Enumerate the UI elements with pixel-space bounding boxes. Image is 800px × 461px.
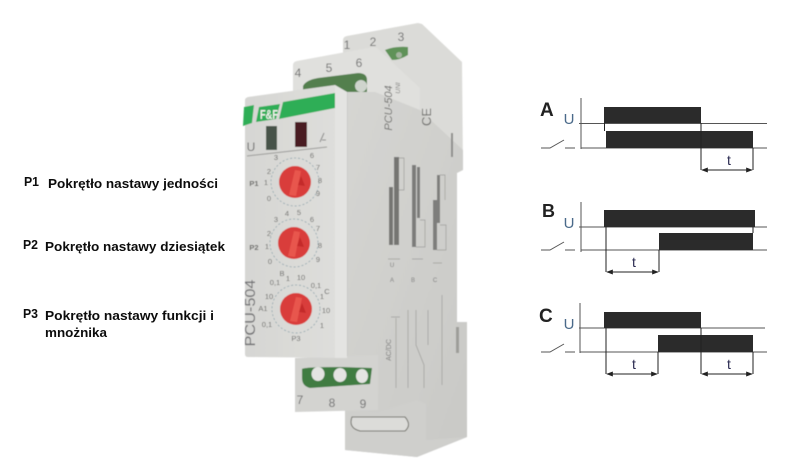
dial P2: 5 — [297, 208, 301, 217]
timing diagram A — [540, 98, 767, 170]
dial P2: 1 — [265, 242, 269, 251]
rear terminal block 1 2 3: 1 — [344, 38, 351, 52]
label: P1 knob description: Pokrętło nastawy jedności — [48, 177, 218, 191]
dial P2: 3 — [274, 215, 278, 224]
dial P1: 7 — [316, 163, 320, 172]
label: P3 knob description — [23, 307, 214, 340]
dial P3: 1 — [320, 292, 324, 301]
timing diagram A: A — [540, 100, 554, 121]
dial P3: 1 — [286, 274, 290, 283]
timing diagram C: C — [539, 306, 553, 327]
side face with printed markings: C — [433, 278, 438, 284]
dial P1: 3 — [274, 153, 278, 162]
rear terminal block 1 2 3 — [343, 23, 463, 170]
dial P1 — [249, 151, 322, 206]
dial P3: 0,1 — [262, 320, 272, 329]
rear terminal block 1 2 3: 3 — [398, 30, 405, 44]
middle terminal block 4 5 6: 4 — [295, 66, 302, 80]
middle terminal block 4 5 6: 6 — [356, 56, 363, 70]
timing diagram C — [539, 303, 767, 374]
dial P3: 0,1 — [311, 281, 321, 290]
bottom terminal block 7 8 9: 8 — [329, 396, 336, 410]
indicator windows: U — [247, 140, 255, 154]
front model name: PCU-504 — [242, 280, 259, 346]
dial P2: 0 — [268, 257, 272, 266]
timing diagram C: U — [564, 316, 574, 333]
label: P3 knob description: Pokrętło nastawy funkcji i — [45, 309, 214, 323]
dial P1: 9 — [316, 189, 320, 198]
timing diagram B: B — [542, 201, 555, 221]
timing diagram C: t — [727, 356, 731, 372]
label: P3 knob description: P3 — [23, 307, 38, 321]
timing diagram B: U — [564, 215, 574, 232]
middle terminal block 4 5 6 — [293, 47, 420, 150]
timing diagram A: t — [727, 152, 731, 168]
dial P2: 6 — [310, 215, 314, 224]
side face with printed markings: UNI — [395, 82, 402, 94]
brand band: F&F logo — [243, 93, 335, 126]
side face with printed markings: CE — [419, 108, 434, 126]
dial P2: 2 — [267, 229, 271, 238]
middle terminal block 4 5 6: 5 — [326, 61, 333, 75]
dial P1: 8 — [318, 176, 322, 185]
label: P3 knob description: mnożnika — [45, 326, 108, 340]
side face with printed markings: AC/DC — [386, 339, 393, 361]
front panel — [242, 85, 347, 358]
dial P1: 0 — [267, 194, 271, 203]
dial P3: A1 — [258, 304, 268, 313]
timing diagram C: t — [632, 356, 636, 372]
dial P1: 1 — [264, 178, 268, 187]
timing diagram A: U — [564, 111, 574, 128]
dial P1: 2 — [267, 167, 271, 176]
dial P3: 1 — [320, 321, 324, 330]
dial P3: 10 — [322, 306, 330, 315]
dial P3 — [258, 269, 330, 343]
bottom terminal block 7 8 9: 9 — [360, 397, 367, 411]
dial P1: 6 — [310, 151, 314, 160]
dial P2: P2 — [249, 243, 259, 252]
rear terminal block 1 2 3: 2 — [370, 35, 377, 49]
device: PCU-504 relay — [242, 23, 467, 457]
DIN rail clip — [345, 400, 467, 457]
dial P3: 10 — [265, 292, 273, 301]
dial P3: C — [324, 287, 330, 296]
indicator windows — [247, 122, 327, 156]
side face with printed markings — [335, 82, 467, 457]
label: P2 knob description: Pokrętło nastawy dziesiątek — [45, 240, 225, 254]
side face with printed markings: B — [411, 278, 415, 284]
timing diagram B — [541, 201, 767, 272]
dial P3: B — [279, 269, 285, 278]
dial P2: 7 — [316, 224, 320, 233]
dial P2 — [249, 208, 322, 267]
side face with printed markings: U — [390, 263, 394, 269]
dial P2: 4 — [285, 209, 289, 218]
timing diagram B: t — [632, 254, 636, 270]
dial P1: P1 — [249, 179, 259, 188]
dial P2: 8 — [318, 241, 322, 250]
dial P3: P3 — [291, 334, 301, 343]
side face with printed markings: A — [390, 278, 394, 284]
side face with printed markings: PCU-504 — [383, 85, 395, 131]
bottom terminal block 7 8 9: 7 — [297, 393, 304, 407]
label: P2 knob description: P2 — [23, 238, 38, 252]
dial P3: 0,1 — [270, 278, 280, 287]
dial P3: 10 — [297, 273, 305, 282]
brand band: F&F logo: F&F — [260, 107, 278, 122]
label: P1 knob description: P1 — [24, 175, 39, 189]
bottom terminal block 7 8 9 — [295, 355, 378, 412]
dial P2: 9 — [316, 255, 320, 264]
